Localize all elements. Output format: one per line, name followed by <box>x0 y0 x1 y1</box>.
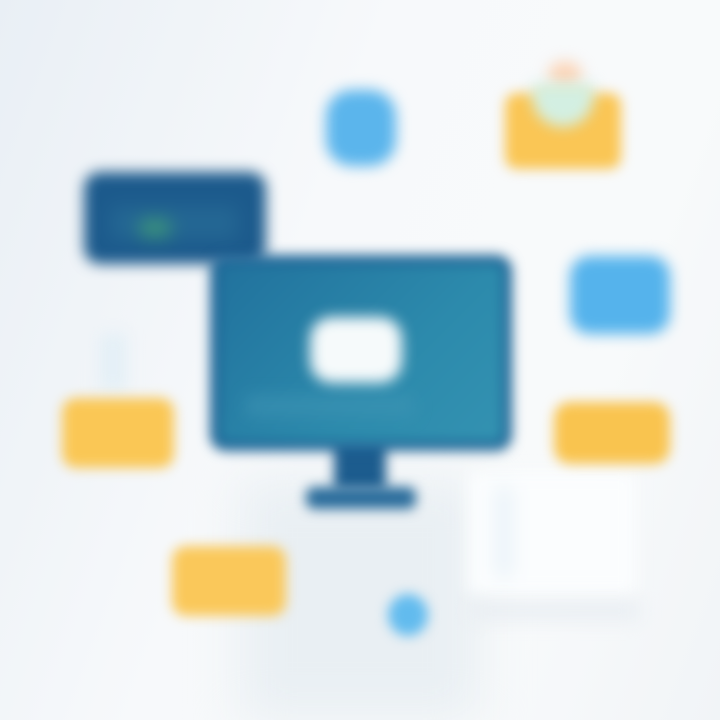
icon: monitor <box>200 244 522 519</box>
left envelope body <box>62 398 174 468</box>
document line <box>498 487 510 577</box>
icon: right envelope <box>554 402 670 464</box>
icon: envelope top right <box>496 54 630 178</box>
monitor white envelope <box>310 317 402 383</box>
icon: left envelope <box>52 336 184 478</box>
icon: bottom envelope <box>172 546 286 616</box>
window lines <box>110 206 238 240</box>
background shade <box>240 480 480 720</box>
green accent <box>140 220 170 236</box>
envelope body <box>505 93 621 169</box>
pale blue antenna <box>100 334 126 390</box>
monitor lower text band <box>245 395 415 417</box>
envelope letter <box>532 83 594 127</box>
panel: white document <box>468 472 636 594</box>
shadow: document <box>470 603 640 619</box>
monitor stand base <box>306 487 416 509</box>
monitor stand neck <box>334 440 386 490</box>
icon: small blue dot <box>388 594 428 636</box>
envelope peach tip <box>548 61 582 89</box>
icon: blue document badge <box>326 90 396 166</box>
panel: small dark window <box>84 172 266 264</box>
icon: blue card right <box>570 256 670 334</box>
monitor screen <box>210 255 512 451</box>
